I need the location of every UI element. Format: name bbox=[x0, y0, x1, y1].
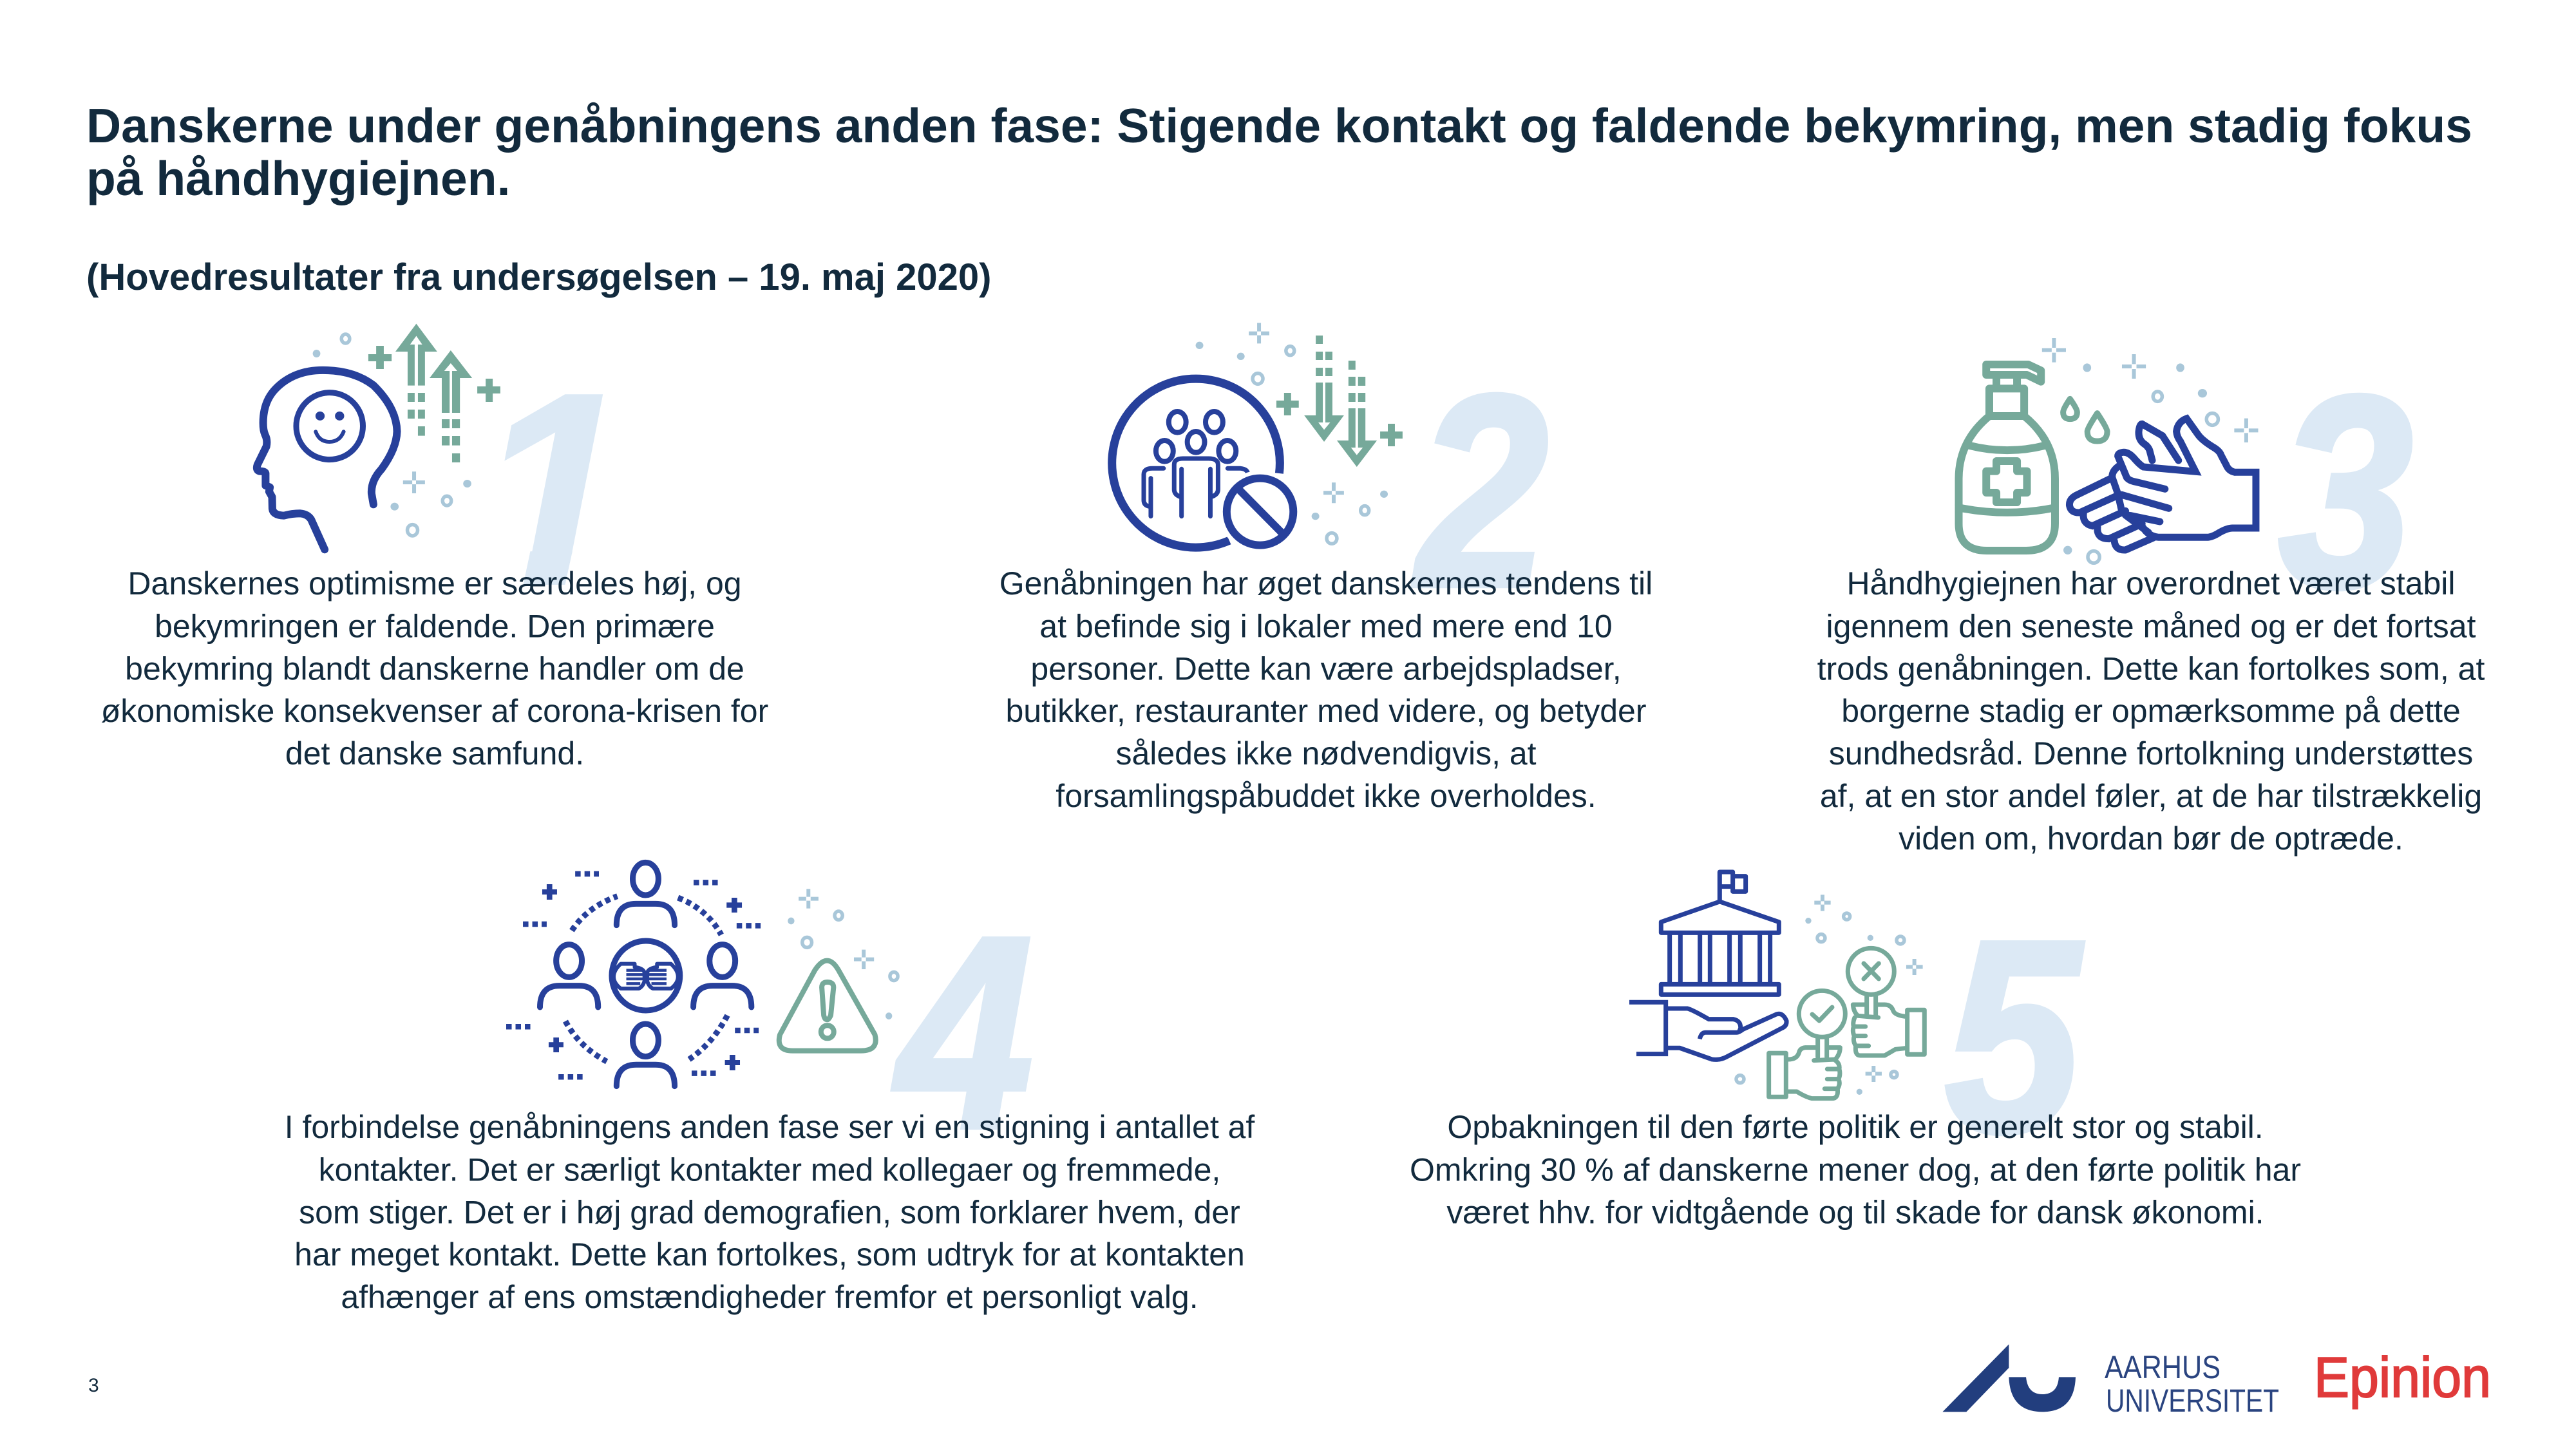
text block 3: af, at en stor andel føler, at de har tilstrækkelig bbox=[1820, 778, 2482, 814]
text block 3: Håndhygiejnen har overordnet været stabil bbox=[1847, 565, 2455, 601]
big number 4: 4 bbox=[889, 880, 1033, 1186]
text block 4: har meget kontakt. Dette kan fortolkes, som udtryk for at kontakten bbox=[294, 1236, 1245, 1273]
text block 4: afhænger af ens omstændigheder fremfor et personligt valg. bbox=[341, 1279, 1198, 1315]
four people bbox=[540, 862, 752, 1086]
sparkle dots bbox=[1736, 895, 1923, 1095]
AU mark bbox=[1942, 1344, 2076, 1412]
handshake circle bbox=[612, 941, 680, 1010]
text block 1: det danske samfund. bbox=[285, 735, 584, 772]
enclosing circle bbox=[1112, 379, 1280, 547]
big number 2: 2 bbox=[1413, 339, 1548, 644]
washing hands bbox=[2069, 419, 2256, 550]
smiley face bbox=[296, 393, 363, 460]
plus signs bbox=[1276, 393, 1403, 446]
text block 3: igennem den seneste måned og er det fortsat bbox=[1826, 608, 2476, 644]
text block 2: Genåbningen har øget danskernes tendens til bbox=[999, 565, 1653, 601]
text block 3: borgerne stadig er opmærksomme på dette bbox=[1841, 693, 2461, 729]
text block 2: således ikke nødvendigvis, at bbox=[1115, 735, 1537, 772]
soap dispenser bottle bbox=[1959, 365, 2055, 551]
text block 3: sundhedsråd. Denne fortolkning understøttes bbox=[1829, 735, 2473, 772]
university name: AARHUS bbox=[2105, 1349, 2221, 1385]
university name: UNIVERSITET bbox=[2106, 1383, 2279, 1419]
soap drops bbox=[2063, 399, 2107, 441]
text block 1: økonomiske konsekvenser af corona-krisen for bbox=[101, 693, 768, 729]
text block 5: Omkring 30 % af danskerne mener dog, at den førte politik har bbox=[1410, 1151, 2301, 1188]
text block 2: butikker, restauranter med videre, og betyder bbox=[1006, 693, 1646, 729]
sparkle dots bbox=[788, 889, 898, 1019]
text block 2: forsamlingspåbuddet ikke overholdes. bbox=[1056, 778, 1596, 814]
text block 2: at befinde sig i lokaler med mere end 10 bbox=[1039, 608, 1613, 644]
rising arrow right bbox=[430, 350, 472, 462]
logo: Aarhus Universitet bbox=[1942, 1344, 2279, 1419]
text block 2: personer. Dette kan være arbejdspladser, bbox=[1030, 650, 1622, 687]
dotted connection arcs bbox=[565, 896, 728, 1061]
plus signs bbox=[368, 346, 500, 402]
icon 4: people in a network with handshake and warning triangle bbox=[506, 862, 898, 1086]
text block 1: bekymring blandt danskerne handler om de bbox=[125, 650, 744, 687]
text block 5: Opbakningen til den førte politik er generelt stor og stabil. bbox=[1447, 1109, 2264, 1145]
big number 5: 5 bbox=[1945, 885, 2085, 1189]
sparkle dots bbox=[1196, 323, 1388, 544]
text block 4: kontakter. Det er særligt kontakter med kollegaer og fremmede, bbox=[319, 1151, 1220, 1188]
text block 4: I forbindelse genåbningens anden fase ser vi en stigning i antallet af bbox=[285, 1109, 1255, 1145]
falling arrow left bbox=[1304, 336, 1344, 442]
logo: Epinion: Epinion bbox=[2314, 1345, 2491, 1409]
text block 4: som stiger. Det er i høj grad demografien, som forklarer hvem, der bbox=[299, 1194, 1240, 1230]
small dash marks bbox=[506, 874, 761, 1077]
text block 1: Danskernes optimisme er særdeles høj, og bbox=[128, 565, 742, 601]
icon 2: crowd with prohibition sign and falling arrows bbox=[1112, 323, 1403, 553]
text block 3: trods genåbningen. Dette kan fortolkes som, at bbox=[1817, 650, 2485, 687]
title: Danskerne under genåbningens anden fase: Stigende kontakt og faldende bekymring, men stadig fokus bbox=[86, 99, 2472, 153]
text block 1: bekymringen er faldende. Den primære bbox=[155, 608, 715, 644]
sparkle dots bbox=[313, 334, 471, 536]
big number 1: 1 bbox=[477, 336, 629, 641]
sparkle dots bbox=[2042, 338, 2259, 563]
government building bbox=[1661, 872, 1779, 994]
prohibition sign bbox=[1218, 471, 1302, 553]
falling arrow right bbox=[1337, 361, 1377, 467]
approve sign in hand bbox=[1769, 990, 1845, 1099]
big number 3: 3 bbox=[2278, 339, 2413, 644]
page number: 3 bbox=[88, 1375, 99, 1396]
subtitle: (Hovedresultater fra undersøgelsen – 19. maj 2020) bbox=[86, 256, 991, 298]
text block 5: været hhv. for vidtgående og til skade for dansk økonomi. bbox=[1446, 1194, 2264, 1230]
plus signs bbox=[542, 884, 742, 1070]
text block 3: viden om, hvordan bør de optræde. bbox=[1899, 820, 2403, 857]
warning triangle bbox=[779, 961, 876, 1051]
icon 5: government building on hand and approve/reject signs bbox=[1629, 872, 1924, 1099]
title: på håndhygiejnen. bbox=[86, 151, 510, 205]
reject sign in hand bbox=[1848, 948, 1924, 1056]
icon 3: soap bottle and washing hands bbox=[1959, 338, 2259, 563]
group of people bbox=[1144, 412, 1248, 516]
head outline bbox=[257, 370, 397, 549]
rising arrow left bbox=[395, 324, 437, 436]
open hand bbox=[1629, 1002, 1786, 1059]
icon 1: head with smiley and rising arrows bbox=[257, 324, 500, 549]
